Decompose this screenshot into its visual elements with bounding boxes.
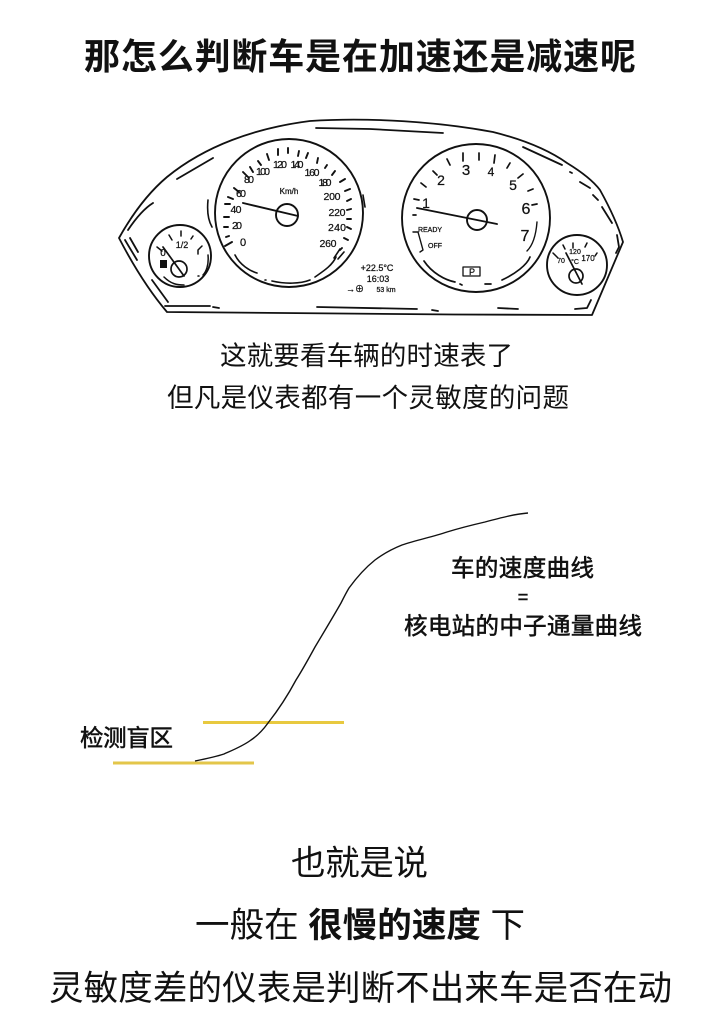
tachometer: 3 bbox=[462, 162, 470, 179]
tachometer: 2 bbox=[437, 172, 445, 188]
speedometer: 220 bbox=[328, 207, 346, 219]
temperature gauge: 70 bbox=[557, 258, 565, 265]
lower yellow threshold line bbox=[113, 762, 254, 764]
speedometer needle bbox=[243, 203, 298, 226]
gear indicator P bbox=[463, 267, 480, 277]
upper yellow threshold line bbox=[203, 721, 344, 724]
label: curve equation bbox=[404, 555, 642, 639]
tachometer: 6 bbox=[522, 201, 531, 218]
conclusion text: 灵敏度差的仪表是判断不出来车是否在动 bbox=[49, 970, 672, 1008]
temperature gauge: 120 bbox=[569, 249, 581, 256]
tachometer: 5 bbox=[509, 177, 517, 193]
speedometer: 240 bbox=[328, 222, 346, 234]
tachometer: READY bbox=[418, 227, 442, 234]
dashboard illustration bbox=[119, 120, 623, 315]
trip computer readout: →⊕ bbox=[346, 284, 364, 294]
intro text: 这就要看车辆的时速表了 bbox=[220, 341, 513, 371]
temperature gauge bbox=[547, 235, 607, 295]
label: curve equation: 核电站的中子通量曲线 bbox=[404, 613, 642, 639]
speedometer: 180 bbox=[318, 177, 332, 189]
tachometer: 1 bbox=[422, 195, 430, 211]
speedometer: 0 bbox=[240, 237, 246, 249]
fuel pump icon bbox=[160, 260, 167, 268]
speedometer bbox=[208, 139, 365, 287]
speedometer: 260 bbox=[320, 238, 337, 250]
temperature gauge: °C bbox=[571, 258, 579, 266]
fuel gauge: 1/2 bbox=[176, 240, 188, 250]
trip computer readout: 16:03 bbox=[367, 274, 389, 284]
conclusion text: 也就是说 bbox=[291, 845, 428, 883]
speedometer: 80 bbox=[244, 174, 254, 186]
trip computer readout bbox=[346, 263, 396, 294]
fuel gauge bbox=[149, 225, 211, 287]
trip computer readout: +22.5°C bbox=[361, 263, 394, 273]
intro text: 但凡是仪表都有一个灵敏度的问题 bbox=[167, 383, 569, 413]
fuel needle bbox=[163, 247, 187, 277]
speedometer: 20 bbox=[232, 220, 242, 232]
speedometer: 140 bbox=[290, 159, 304, 171]
temperature gauge: 170 bbox=[581, 254, 595, 263]
speedometer: 200 bbox=[324, 191, 341, 203]
speedometer: Km/h bbox=[280, 187, 298, 196]
tachometer bbox=[402, 144, 550, 292]
speedometer: 100 bbox=[256, 166, 270, 178]
speedometer: 120 bbox=[273, 159, 287, 171]
gear indicator P: P bbox=[469, 267, 475, 277]
label: curve equation: 车的速度曲线 bbox=[451, 555, 594, 581]
title: 那怎么判断车是在加速还是减速呢 bbox=[84, 36, 636, 77]
dashboard outline bbox=[119, 120, 623, 315]
conclusion text bbox=[49, 845, 672, 1008]
intro text bbox=[167, 341, 569, 413]
fuel gauge: 0 bbox=[160, 248, 166, 259]
tachometer needle bbox=[417, 208, 497, 230]
speedometer: 160 bbox=[304, 167, 320, 179]
label: curve equation: = bbox=[518, 587, 528, 607]
conclusion text: 一般在 很慢的速度 下 bbox=[195, 907, 525, 945]
tachometer: 4 bbox=[488, 165, 495, 179]
speedometer: 60 bbox=[236, 188, 246, 200]
speedometer: 40 bbox=[230, 204, 242, 216]
trip computer readout: 53 km bbox=[376, 287, 396, 294]
label: blind zone: 检测盲区 bbox=[80, 725, 173, 751]
speed curve chart bbox=[80, 513, 642, 763]
tachometer: OFF bbox=[428, 243, 442, 250]
tachometer: 7 bbox=[521, 228, 530, 245]
speed curve bbox=[195, 513, 528, 761]
temperature needle bbox=[566, 253, 583, 284]
